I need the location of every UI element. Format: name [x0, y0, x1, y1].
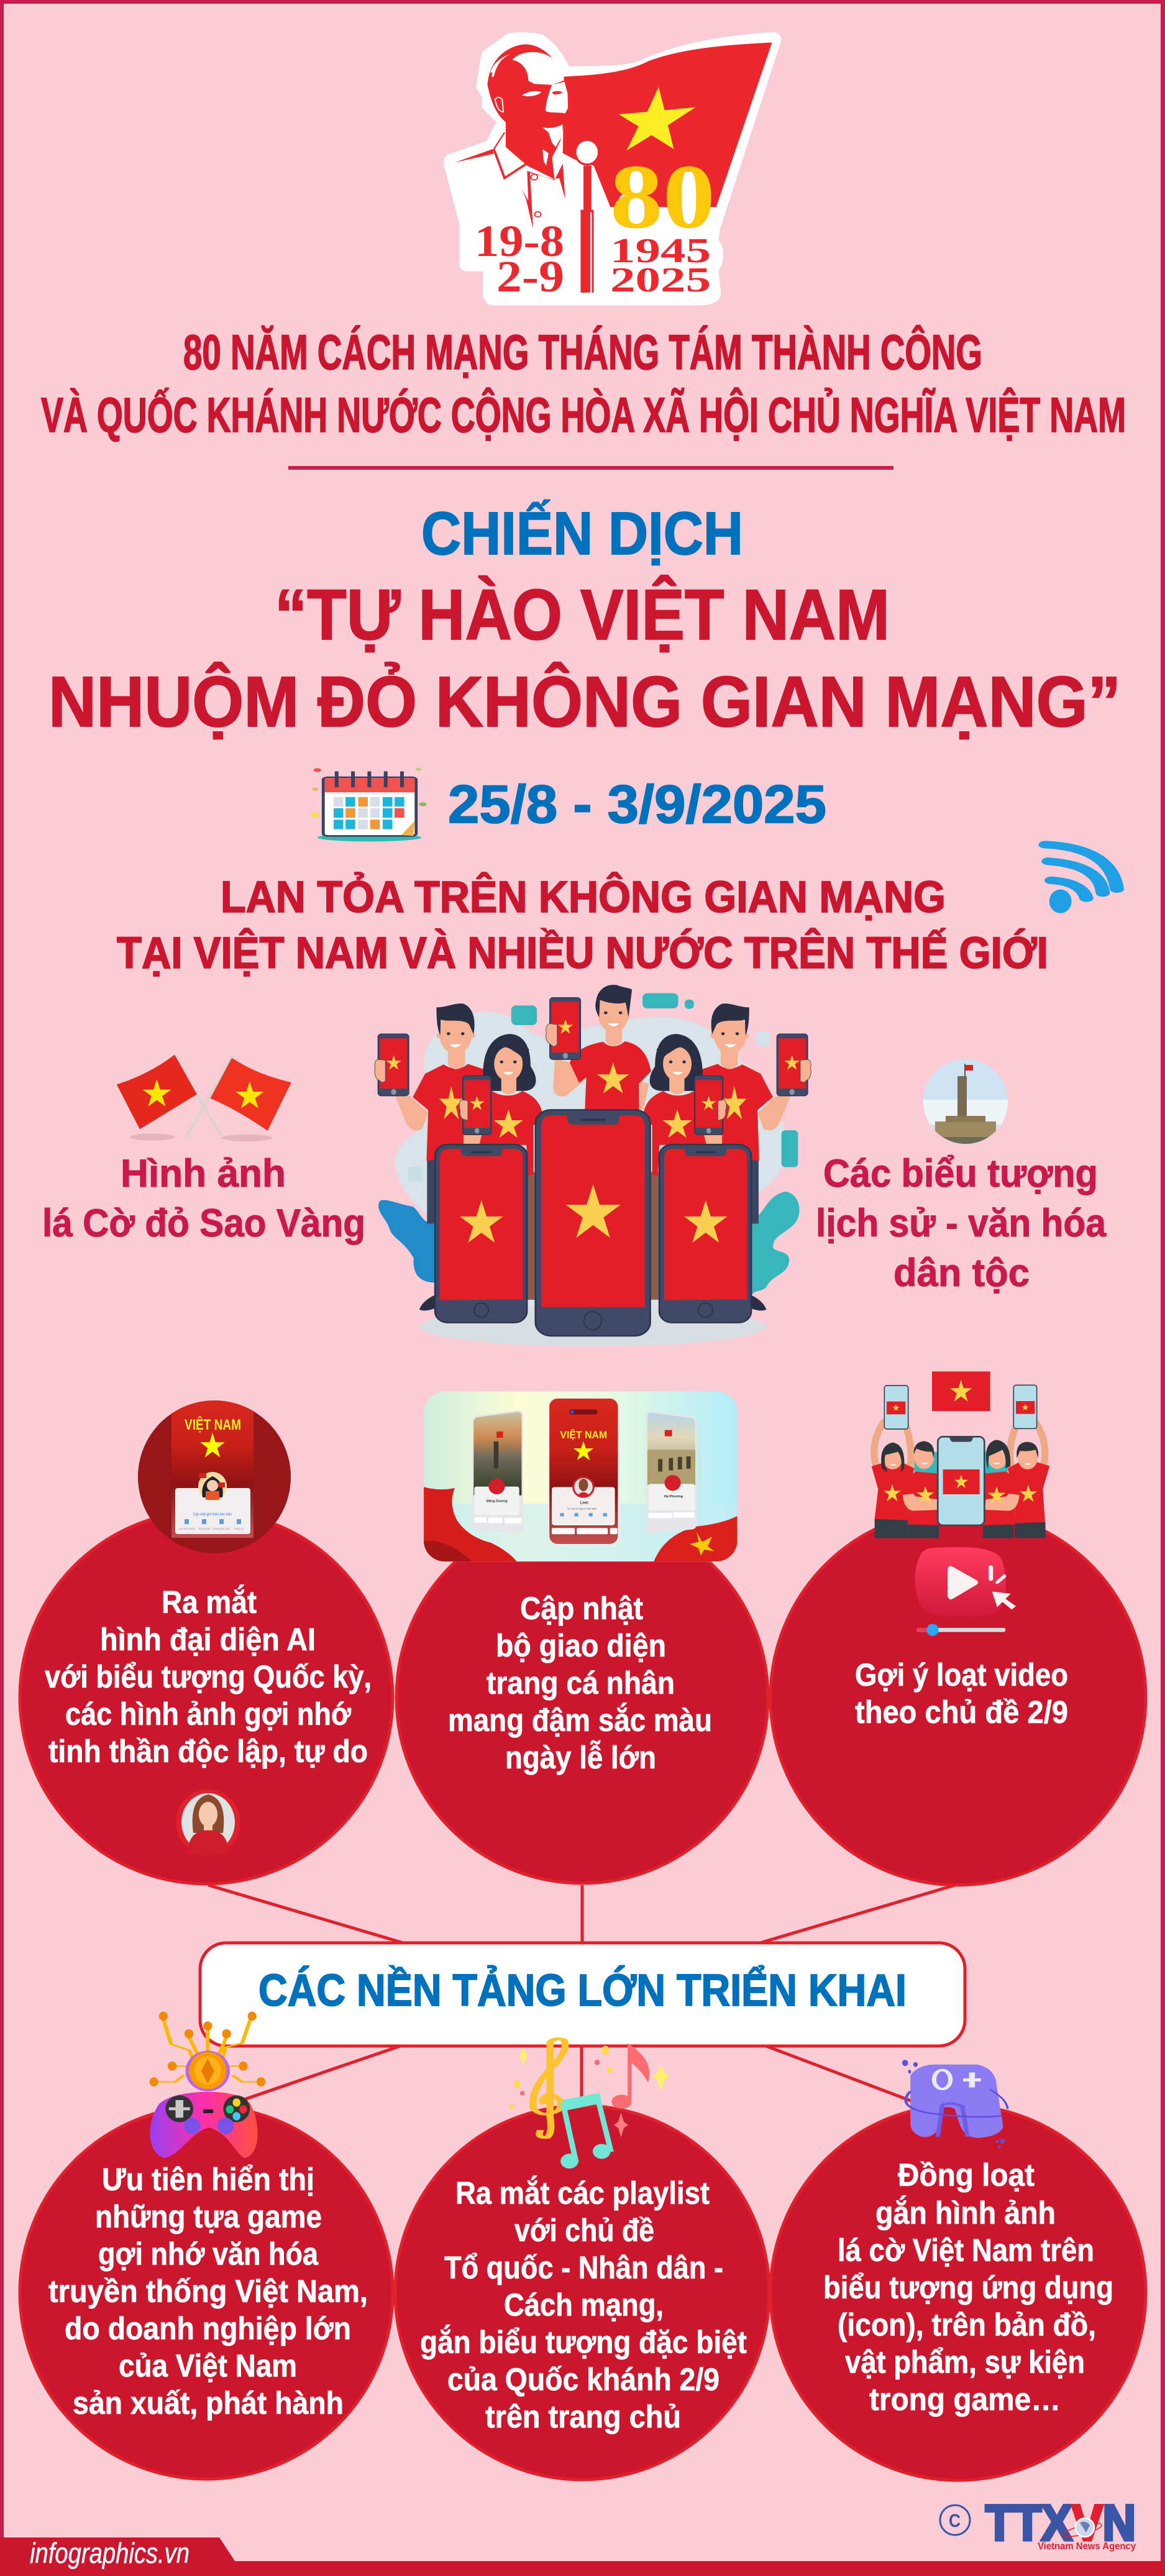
subheading: [117, 872, 1048, 978]
panel: games circle: Ưu tiên hiển thị: [102, 2162, 314, 2197]
phone: centre theme: Tự hào là người Việt Nam: [567, 1507, 597, 1510]
panel: music circle: Tổ quốc - Nhân dân -: [444, 2250, 723, 2285]
left label: flag images: lá Cờ đỏ Sao Vàng: [42, 1202, 365, 1245]
icon: wifi: [1046, 844, 1117, 913]
panel: music circle: Ra mắt các playlist: [455, 2175, 710, 2211]
panel: games circle: do doanh nghiệp lớn: [65, 2311, 351, 2346]
callout box: platforms heading: CÁC NỀN TẢNG LỚN TRIỂN KHAI: [258, 1965, 907, 2016]
person: woman right: [643, 1034, 726, 1300]
phone: centre theme: [548, 1398, 619, 1546]
footer band: [0, 2537, 1165, 2576]
person: man centre: [546, 985, 651, 1110]
panel: music circle: Cách mạng,: [504, 2287, 664, 2323]
phone: left theme: [472, 1410, 523, 1533]
panel: games circle: truyền thống Việt Nam,: [48, 2273, 368, 2309]
panel: AI avatar circle: tinh thần độc lập, tự do: [48, 1733, 368, 1769]
panel: AI avatar circle: các hình ảnh gợi nhớ: [65, 1696, 352, 1732]
phone: centre large: [536, 1110, 650, 1336]
panel: profile theme circle: Cập nhật: [520, 1591, 643, 1626]
image: AI avatar profile: Trang trí: [234, 1527, 245, 1530]
panel: video circle: [770, 1510, 1146, 1885]
panel: AI avatar circle: hình đại diện AI: [100, 1622, 316, 1657]
panel: music circle: với chủ đề: [514, 2213, 654, 2248]
right label: cultural symbols: lịch sử - văn hóa: [816, 1202, 1107, 1245]
person: man right: [699, 1003, 811, 1310]
panel: video circle: theo chủ đề 2/9: [855, 1694, 1068, 1730]
panel: in-game flag circle: (icon), trên bản đồ,: [838, 2307, 1096, 2342]
panel: in-game flag circle: gắn hình ảnh: [875, 2195, 1056, 2231]
campaign dates: 25/8 - 3/9/2025: [448, 775, 826, 834]
illustration: people holding phones: [375, 985, 811, 1346]
panel: games circle: những tựa game: [95, 2199, 322, 2234]
panel: profile theme circle: trang cá nhân: [487, 1665, 675, 1701]
logo year 2025: 2025: [610, 261, 711, 299]
panel: in-game flag circle: trong game…: [869, 2382, 1061, 2417]
logo: TTXVN: TTXVN: [985, 2495, 1136, 2551]
panel: music circle: gắn biểu tượng đặc biệt: [420, 2324, 747, 2360]
connector lines upper: [208, 1885, 955, 1943]
image: AI avatar profile: Cập nhật giới thiệu bản thân: [193, 1513, 232, 1517]
phone: centre theme: VIỆT NAM: [560, 1429, 607, 1441]
logo date 19-8: 19-8: [475, 216, 564, 266]
phone: right theme: Hà Phương: [664, 1495, 683, 1499]
copyright symbol: [940, 2505, 970, 2535]
panel: music circle: của Quốc khánh 2/9: [447, 2362, 720, 2397]
panel: in-game flag circle: vật phẩm, sự kiện: [845, 2344, 1085, 2380]
panel: profile theme circle: mang đậm sắc màu: [448, 1702, 712, 1738]
image: AI avatar profile: [138, 1398, 291, 1553]
right label: cultural symbols: [816, 1152, 1107, 1295]
panel: profile theme circle: bộ giao diện: [496, 1628, 666, 1663]
logo year 1945: 1945: [610, 232, 711, 270]
logo date 2-9: 2-9: [496, 252, 564, 301]
icon: crossed flags: [117, 1054, 291, 1141]
phone: left theme: Đăng Dương: [487, 1499, 508, 1503]
panel: AI avatar circle: [20, 1511, 393, 1884]
title heading: [41, 324, 1126, 442]
phone: centre theme: Linh: [580, 1501, 588, 1505]
image: AI avatar profile: Đăng ảnh bìa: [213, 1527, 231, 1530]
subheading: LAN TỎA TRÊN KHÔNG GIAN MẠNG: [221, 872, 946, 922]
campaign name: “TỰ HÀO VIỆT NAM: [275, 575, 890, 655]
person: woman left: [459, 1034, 543, 1300]
campaign label: CHIẾN DỊCH: [421, 500, 743, 567]
panel: games circle: của Việt Nam: [119, 2348, 297, 2383]
left label: flag images: Hình ảnh: [121, 1152, 286, 1195]
campaign name: [48, 575, 1121, 742]
footer source: infographics.vn: [30, 2537, 190, 2569]
right label: cultural symbols: Các biểu tượng: [823, 1152, 1098, 1195]
icon: flag tower: [923, 1059, 1008, 1144]
image: AI avatar profile: Khoảnh khắc: [179, 1527, 196, 1530]
phone: left large: [435, 1144, 527, 1323]
person: man left: [375, 1003, 487, 1310]
panel: in-game flag circle: [770, 2105, 1146, 2480]
panel: in-game flag circle: biểu tượng ứng dụng: [823, 2270, 1113, 2305]
right label: cultural symbols: dân tộc: [893, 1251, 1030, 1295]
image: profile themes: [424, 1391, 738, 1561]
connector lines lower: [206, 2046, 958, 2119]
subheading: TẠI VIỆT NAM VÀ NHIỀU NƯỚC TRÊN THẾ GIỚI: [117, 928, 1048, 978]
logo number 80: 80: [610, 146, 715, 248]
image: AI avatar profile: Đăng bài: [199, 1527, 210, 1530]
phone: right theme: [646, 1411, 697, 1533]
image: people with national flag: [872, 1371, 1049, 1538]
panel: video circle: Gợi ý loạt video: [855, 1657, 1068, 1692]
panel: music circle: trên trang chủ: [485, 2399, 681, 2434]
logo: 80 years emblem: [444, 32, 782, 306]
panel: music circle: [395, 2106, 769, 2480]
image: AI avatar profile: VIỆT NAM: [185, 1416, 241, 1433]
icon: game controller: [150, 2012, 265, 2158]
panel: AI avatar circle: với biểu tượng Quốc kỳ,: [45, 1659, 372, 1694]
panel: profile theme circle: [396, 1512, 768, 1883]
icon: small avatar: [176, 1789, 240, 1855]
panel: games circle: [20, 2106, 393, 2479]
panel: profile theme circle: ngày lễ lớn: [505, 1740, 656, 1775]
left label: flag images: [42, 1152, 365, 1245]
icon: music notes: [509, 2039, 670, 2168]
panel: AI avatar circle: Ra mắt: [162, 1584, 257, 1620]
panel: in-game flag circle: Đồng loạt: [898, 2157, 1035, 2193]
copyright symbol: C: [949, 2511, 961, 2531]
logo: TTXVN: Vietnam News Agency: [1038, 2541, 1136, 2552]
icon: video play button: [915, 1547, 1016, 1636]
panel: in-game flag circle: lá cờ Việt Nam trên: [838, 2232, 1094, 2268]
phone: right large: [659, 1144, 751, 1323]
icon: purple game pad: [902, 2060, 1008, 2148]
icon: calendar: [311, 768, 427, 841]
callout box: platforms heading: [200, 1943, 965, 2046]
panel: games circle: gợi nhớ văn hóa: [98, 2236, 319, 2272]
panel: games circle: sản xuất, phát hành: [73, 2385, 344, 2421]
